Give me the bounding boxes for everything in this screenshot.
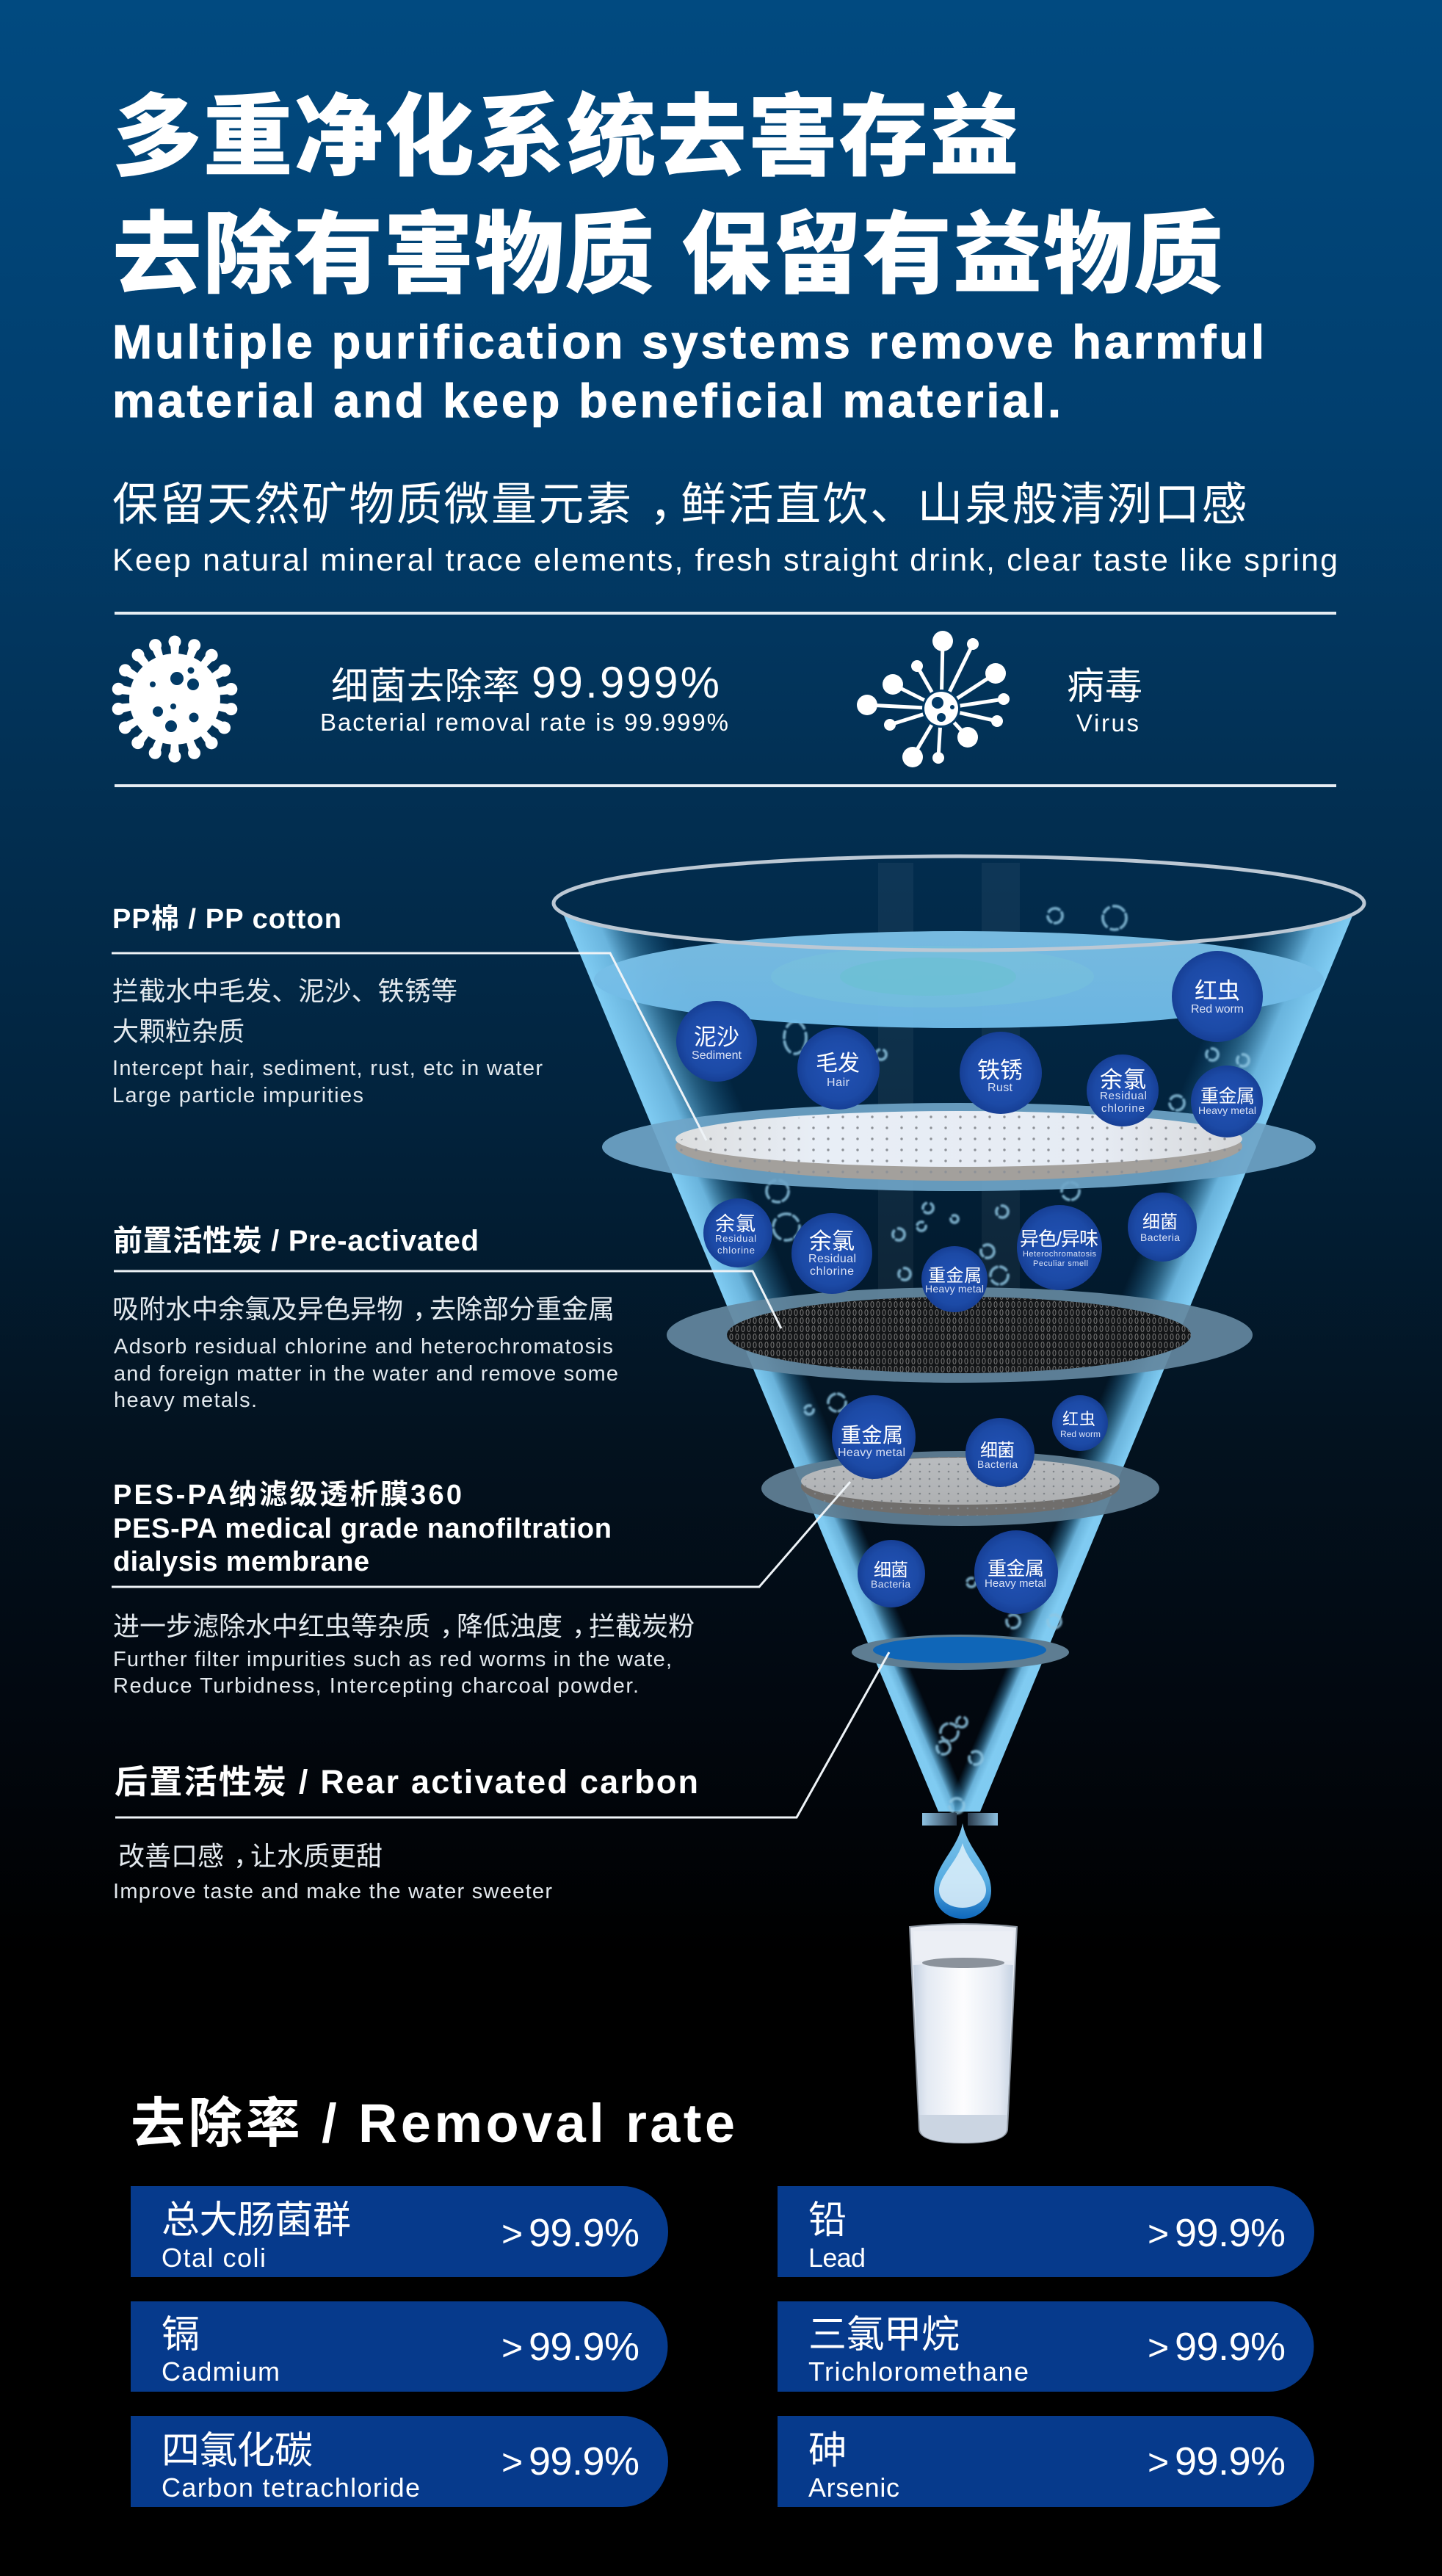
ball: heavy metal centre: 重金属 xyxy=(928,1266,982,1286)
card: total coliform: > xyxy=(501,2213,523,2254)
callout: pre-activated carbon: Adsorb residual chlorine and heterochromatosis xyxy=(114,1335,613,1358)
bacterial removal rate text xyxy=(320,658,728,736)
callout: rear activated carbon xyxy=(113,1763,698,1903)
small water bubbles xyxy=(767,906,1249,1813)
card: cadmium: Cadmium xyxy=(162,2356,280,2387)
filter layer: PP cotton xyxy=(602,1103,1316,1191)
card: arsenic: 99.9% xyxy=(1175,2439,1286,2483)
card: lead: > xyxy=(1148,2213,1169,2254)
ball: residual chlorine small: chlorine xyxy=(717,1245,755,1256)
ball: hair: 毛发 xyxy=(816,1052,860,1076)
callout: PES-PA membrane: PES-PA纳滤级透析膜360 xyxy=(113,1480,462,1510)
funnel mouth interior xyxy=(552,855,1366,951)
ball: bacteria third layer: Bacteria xyxy=(977,1458,1018,1470)
callout: PP cotton: PP棉 / PP cotton xyxy=(112,904,341,935)
card: carbon tetrachloride: > xyxy=(501,2442,523,2483)
ball: red worm third layer: Red worm xyxy=(1060,1429,1101,1439)
ball: heavy metal centre xyxy=(921,1246,988,1312)
callout line: PP cotton xyxy=(112,953,706,1140)
callout line: rear carbon xyxy=(115,1652,889,1817)
ball: heavy metal: Heavy metal xyxy=(1198,1104,1256,1116)
callout: PP cotton: 拦截水中毛发、泥沙、铁锈等 xyxy=(112,976,457,1006)
callout: rear activated carbon: 后置活性炭 / Rear activated carbon xyxy=(115,1763,698,1801)
ball: heavy metal third layer xyxy=(832,1395,916,1479)
ball: residual chlorine small xyxy=(703,1198,772,1267)
bacterial removal rate text: 细菌去除率 xyxy=(331,665,520,707)
ball: red worm xyxy=(1172,951,1263,1042)
callout: PES-PA membrane: Further filter impurities such as red worms in the wate, xyxy=(113,1648,672,1671)
card: lead xyxy=(778,2186,1314,2277)
ball: heavy metal third layer: 重金属 xyxy=(841,1424,903,1447)
ball: bacteria fourth layer: 细菌 xyxy=(874,1560,908,1580)
contaminant balls xyxy=(676,951,1263,1614)
virus text: 病毒 xyxy=(1067,665,1142,707)
ball: sediment xyxy=(676,1001,757,1082)
removal rate cards xyxy=(131,2186,1314,2507)
ball: bacteria: 细菌 xyxy=(1142,1212,1178,1232)
card: cadmium: > xyxy=(501,2327,523,2368)
ball: sediment: Sediment xyxy=(692,1049,742,1062)
ball: heavy metal third layer: Heavy metal xyxy=(838,1447,905,1459)
ball: residual chlorine: Residual xyxy=(1100,1090,1147,1102)
ball: residual chlorine: chlorine xyxy=(1101,1102,1145,1115)
callout line: membrane xyxy=(112,1482,850,1587)
funnel rim xyxy=(554,856,1364,950)
ball: heterochromatosis: 异色/异味 xyxy=(1020,1228,1098,1250)
callout: PES-PA membrane: 进一步滤除水中红虫等杂质 ，降低浊度 ，拦截炭粉 xyxy=(113,1611,695,1641)
ball: heterochromatosis: Heterochromatosis xyxy=(1023,1250,1097,1259)
ball: red worm third layer: 红虫 xyxy=(1062,1410,1095,1428)
ball: heavy metal centre: Heavy metal xyxy=(925,1283,984,1295)
ball: rust xyxy=(960,1032,1042,1114)
ball: sediment: 泥沙 xyxy=(694,1024,739,1050)
callout: PES-PA membrane xyxy=(113,1480,695,1698)
ball: bacteria xyxy=(1128,1193,1197,1262)
ball: bacteria third layer: 细菌 xyxy=(980,1441,1015,1461)
heading: removal rate: 去除率 / Removal rate xyxy=(131,2093,735,2154)
ball: bacteria fourth layer: Bacteria xyxy=(871,1578,910,1590)
callout line: pre-activated xyxy=(114,1271,781,1328)
english subtitle: material and keep beneficial material. xyxy=(112,374,1061,427)
icon: glass of water xyxy=(910,1924,1017,2143)
ball: heavy metal fourth layer xyxy=(974,1530,1058,1614)
ball: heavy metal fourth layer: Heavy metal xyxy=(985,1577,1046,1590)
filter layer: pre-activated carbon xyxy=(667,1287,1253,1383)
virus text: Virus xyxy=(1076,709,1139,737)
english subtitle xyxy=(112,315,1264,427)
card: trichloromethane: Trichloromethane xyxy=(808,2356,1029,2387)
ball: hair: Hair xyxy=(827,1077,850,1089)
ball: bacteria fourth layer xyxy=(858,1540,925,1607)
card: trichloromethane: > xyxy=(1148,2327,1169,2368)
ball: red worm: Red worm xyxy=(1191,1003,1244,1016)
ball: residual chlorine large: Residual xyxy=(808,1253,856,1265)
callout: PES-PA membrane: PES-PA medical grade nanofiltration xyxy=(113,1513,612,1544)
callout: PP cotton: 大颗粒杂质 xyxy=(112,1016,244,1046)
card: carbon tetrachloride: Carbon tetrachloride xyxy=(162,2472,420,2503)
ball: rust: 铁锈 xyxy=(977,1057,1023,1083)
funnel glass walls xyxy=(564,915,1352,1812)
title: 多重净化系统去害存益 xyxy=(112,87,1019,187)
ball: red worm third layer xyxy=(1052,1395,1108,1451)
ball: residual chlorine small: Residual xyxy=(715,1233,756,1244)
ball: rust: Rust xyxy=(988,1082,1013,1094)
card: trichloromethane: 三氯甲烷 xyxy=(808,2314,960,2356)
ball: heterochromatosis xyxy=(1017,1205,1102,1290)
ball: heavy metal fourth layer: 重金属 xyxy=(988,1557,1044,1580)
card: lead: Lead xyxy=(808,2243,866,2273)
card: carbon tetrachloride: 四氯化碳 xyxy=(162,2430,313,2472)
card: arsenic xyxy=(778,2416,1314,2507)
callout: pre-activated carbon: 前置活性炭 / Pre-activated xyxy=(113,1225,479,1257)
card: trichloromethane: 99.9% xyxy=(1175,2325,1286,2369)
water surface xyxy=(594,931,1324,1028)
ball: residual chlorine: 余氯 xyxy=(1100,1067,1146,1093)
callout: PP cotton xyxy=(112,904,543,1107)
ball: residual chlorine large: chlorine xyxy=(810,1265,854,1278)
card: total coliform xyxy=(131,2186,668,2277)
ball: heterochromatosis: Peculiar smell xyxy=(1033,1259,1088,1268)
callout: rear activated carbon: Improve taste and make the water sweeter xyxy=(113,1880,552,1903)
icon: water drop xyxy=(934,1823,991,1919)
ball: residual chlorine large xyxy=(791,1213,872,1294)
card: arsenic: 砷 xyxy=(808,2430,847,2472)
callout: PP cotton: Large particle impurities xyxy=(112,1084,363,1107)
ball: hair xyxy=(797,1027,880,1110)
ball: residual chlorine small: 余氯 xyxy=(715,1213,756,1235)
virus text xyxy=(1067,665,1142,737)
callout: rear activated carbon: 改善口感 ，让水质更甜 xyxy=(118,1841,383,1871)
card: total coliform: Otal coli xyxy=(162,2243,266,2273)
callout: PP cotton: Intercept hair, sediment, rust, etc in water xyxy=(112,1057,543,1080)
tagline: 保留天然矿物质微量元素 ，鲜活直饮、山泉般清洌口感 xyxy=(112,480,1249,530)
card: carbon tetrachloride xyxy=(131,2416,668,2507)
card: lead: 铅 xyxy=(808,2199,847,2242)
card: cadmium: 镉 xyxy=(162,2314,200,2356)
funnel nozzle xyxy=(922,1813,998,1826)
tagline xyxy=(112,480,1338,578)
ball: heavy metal: 重金属 xyxy=(1200,1086,1255,1107)
card: cadmium: 99.9% xyxy=(529,2325,640,2369)
ball: bacteria: Bacteria xyxy=(1140,1231,1180,1243)
filter layer: PES-PA membrane xyxy=(761,1451,1159,1526)
bacterial removal rate text: 99.999% xyxy=(532,658,720,707)
card: carbon tetrachloride: 99.9% xyxy=(529,2439,640,2483)
callout: PES-PA membrane: Reduce Turbidness, Intercepting charcoal powder. xyxy=(113,1674,639,1698)
tagline: Keep natural mineral trace elements, fresh straight drink, clear taste like spring xyxy=(112,543,1338,578)
callout: PES-PA membrane: dialysis membrane xyxy=(113,1546,369,1577)
card: trichloromethane xyxy=(778,2301,1314,2392)
ball: bacteria third layer xyxy=(965,1418,1035,1487)
callout: pre-activated carbon: and foreign matter in the water and remove some xyxy=(114,1362,618,1386)
icon: bacteria xyxy=(117,642,232,756)
ball: residual chlorine xyxy=(1087,1054,1159,1126)
card: arsenic: > xyxy=(1148,2442,1169,2483)
icon: virus xyxy=(857,631,1010,767)
card: total coliform: 99.9% xyxy=(529,2211,640,2255)
english subtitle: Multiple purification systems remove harmful xyxy=(112,315,1264,369)
title: 去除有害物质 保留有益物质 xyxy=(112,205,1223,305)
ball: heavy metal xyxy=(1191,1066,1263,1137)
card: total coliform: 总大肠菌群 xyxy=(162,2199,351,2242)
bacterial removal rate text: Bacterial removal rate is 99.999% xyxy=(320,709,728,736)
callout: pre-activated carbon: heavy metals. xyxy=(114,1389,257,1412)
title xyxy=(112,87,1223,305)
ball: residual chlorine large: 余氯 xyxy=(809,1229,855,1254)
funnel filter diagram xyxy=(514,855,1410,1826)
callout: pre-activated carbon xyxy=(112,1225,618,1412)
card: arsenic: Arsenic xyxy=(808,2472,899,2503)
filter layer: rear activated carbon xyxy=(852,1635,1069,1670)
callout: pre-activated carbon: 吸附水中余氯及异色异物 ，去除部分重金属 xyxy=(112,1294,615,1324)
card: cadmium xyxy=(131,2301,667,2392)
ball: red worm: 红虫 xyxy=(1195,978,1240,1004)
card: lead: 99.9% xyxy=(1175,2211,1286,2255)
